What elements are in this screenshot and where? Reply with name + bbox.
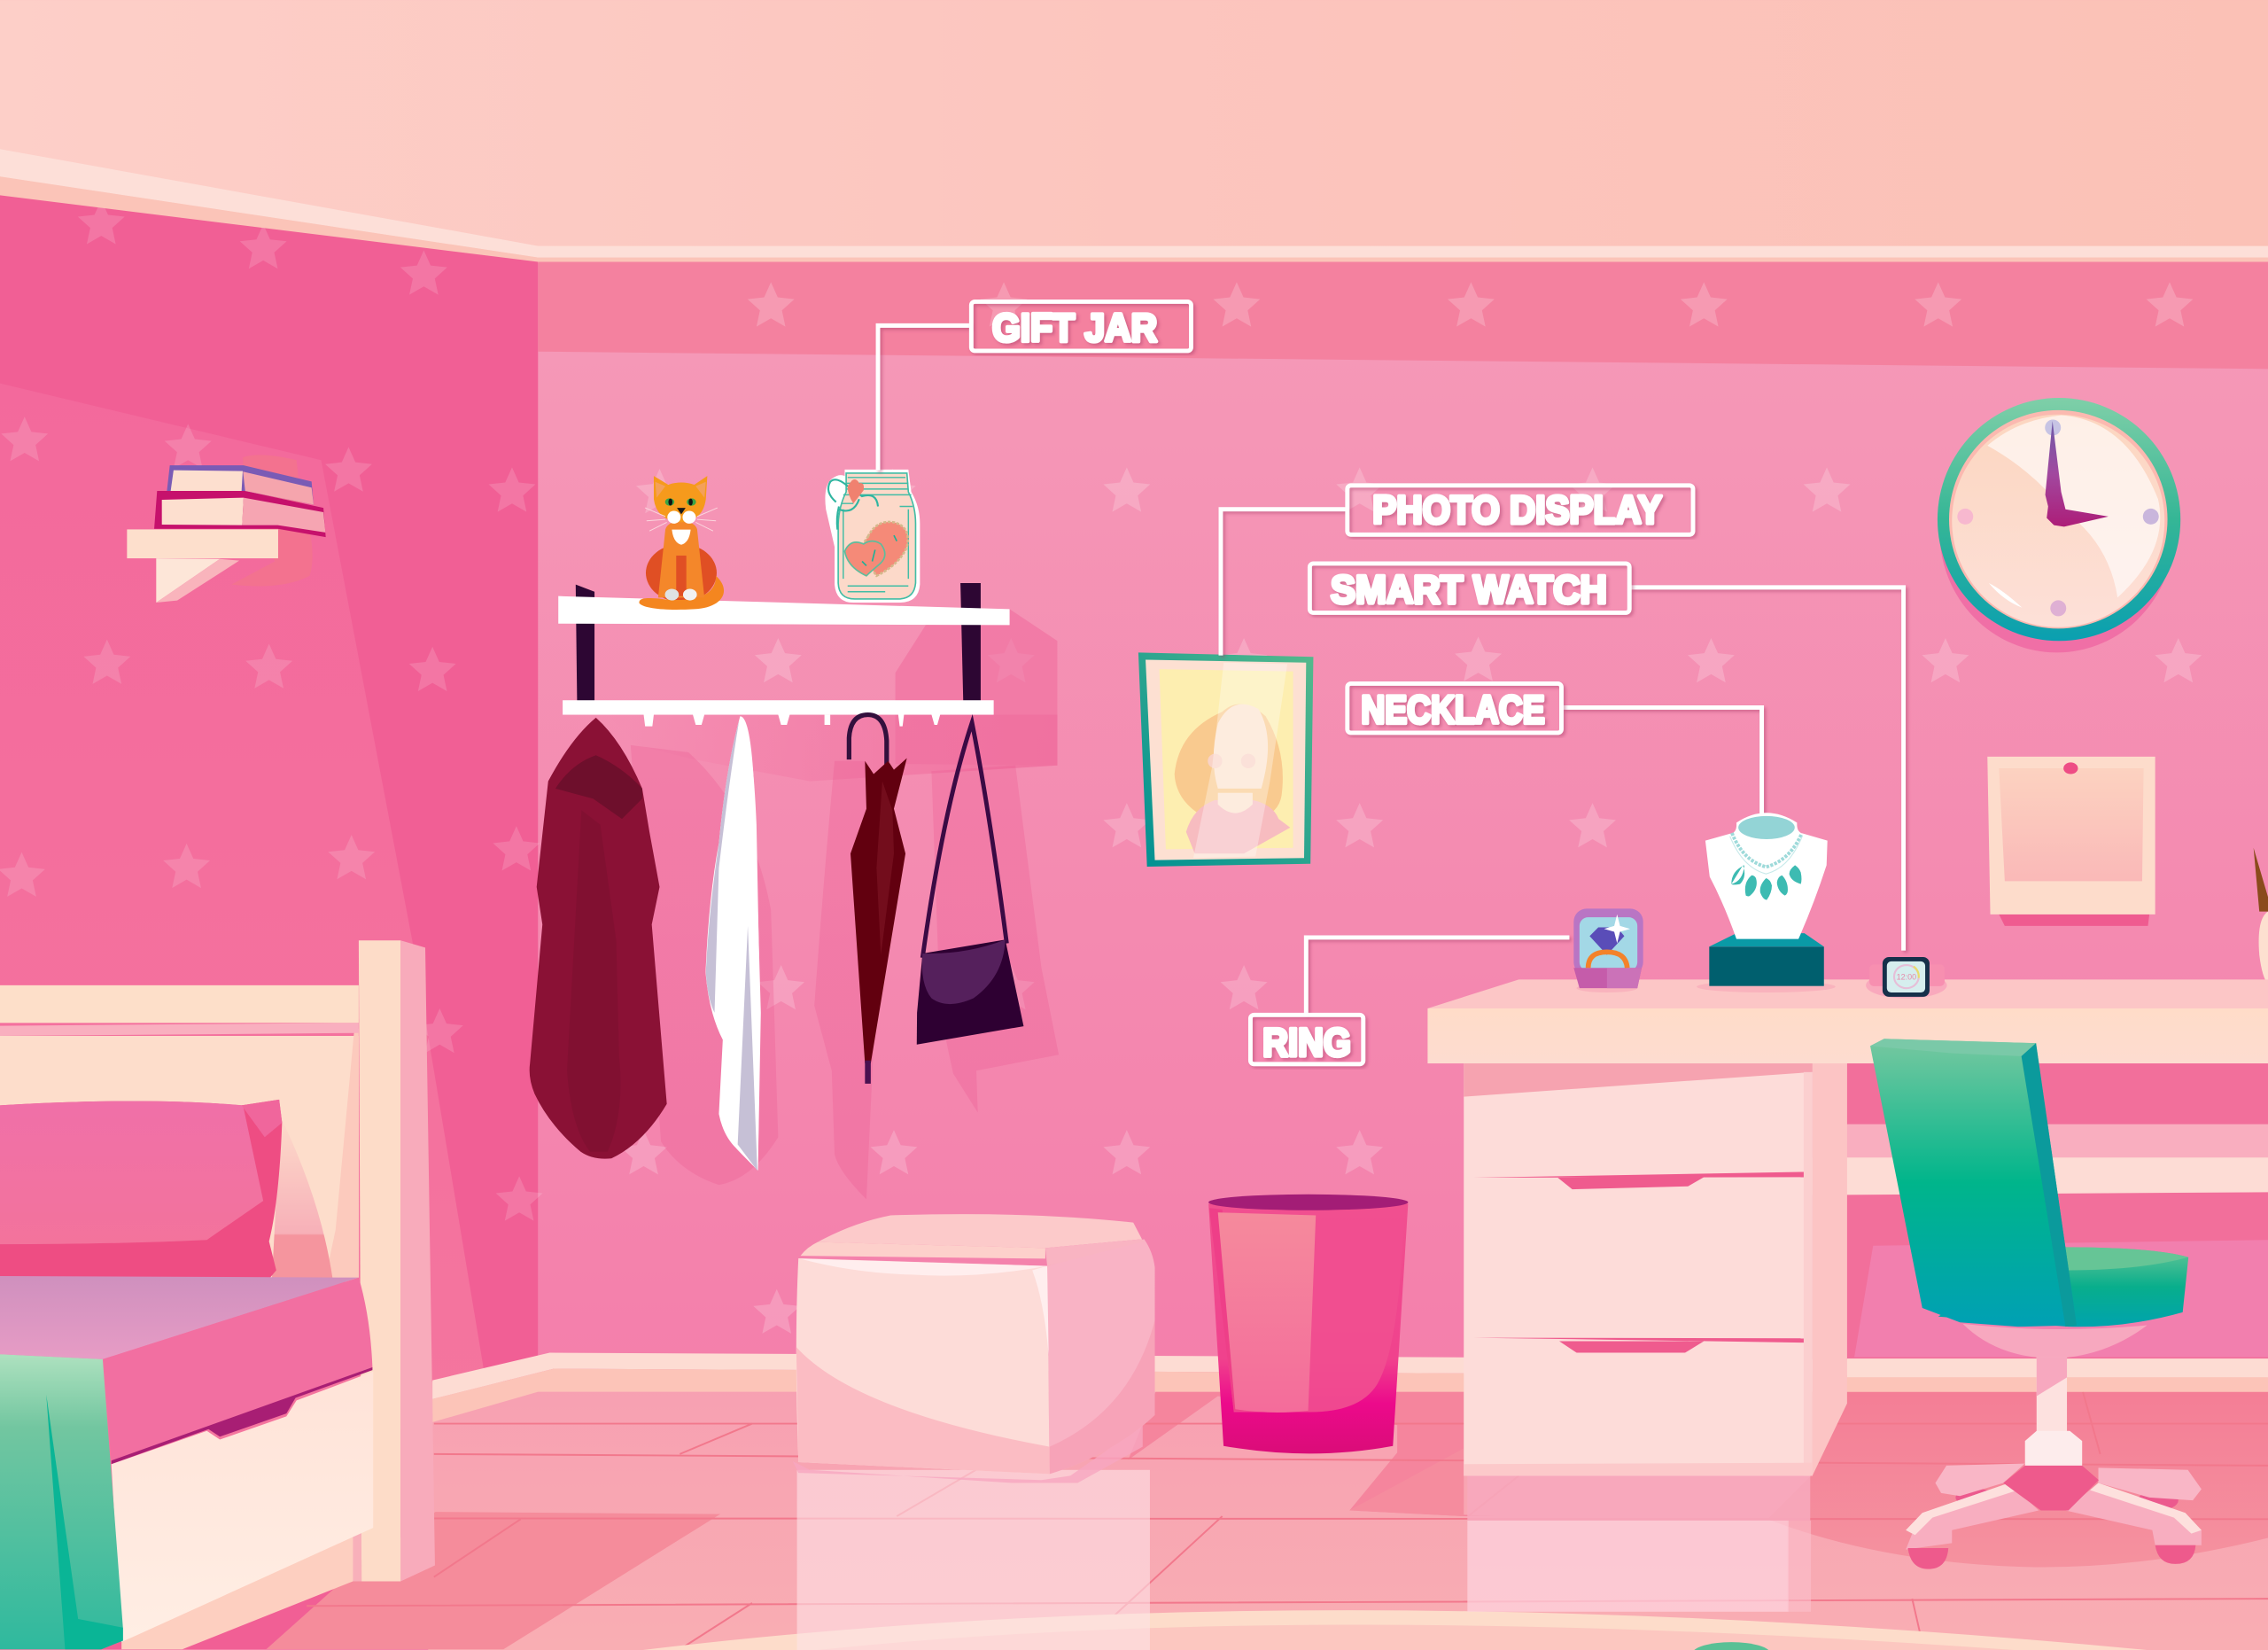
garment shadows <box>631 745 1059 1199</box>
label: gift jar: GIFT JAR <box>992 307 1157 350</box>
ceiling moulding <box>0 149 2268 262</box>
shaded floor under chair <box>1767 1392 2268 1567</box>
shelf posts <box>576 583 981 704</box>
wallpaper stars: left wall <box>0 199 543 1221</box>
smart watch: 12:00 <box>1897 972 1916 981</box>
ottoman lid <box>818 1214 1142 1248</box>
ribbon <box>828 479 878 530</box>
round rug at bottom <box>636 1610 2155 1650</box>
ottoman highlight <box>800 1258 1047 1276</box>
shaded floor near bin <box>1128 1392 1500 1516</box>
connector: necklace <box>1562 707 1762 814</box>
connector: ring <box>1306 938 1569 1015</box>
base hub <box>2003 1466 2099 1511</box>
cat figurine <box>639 476 724 610</box>
label: necklace: NECKLACE <box>1361 689 1545 732</box>
desk front edge <box>1427 1008 2268 1063</box>
ottoman front <box>796 1258 1050 1474</box>
front casters <box>1907 1548 1948 1569</box>
green blanket <box>0 1354 123 1649</box>
bed post <box>359 940 435 1582</box>
desk top surface <box>1427 979 2268 1008</box>
floor <box>266 1381 2268 1650</box>
big heart <box>859 522 908 576</box>
wall shelf with books <box>127 455 326 603</box>
handbag <box>917 723 1023 1045</box>
jar outline <box>825 470 920 603</box>
plant and vase at right edge <box>2254 848 2268 984</box>
back wall <box>538 261 2268 1374</box>
wall clock <box>1938 398 2180 652</box>
chair backrest <box>1870 1039 2077 1327</box>
necklace bust <box>1697 813 1836 992</box>
white scarf <box>705 716 761 1171</box>
small heart <box>844 541 885 576</box>
floor reflections of ottoman and drawers <box>797 1470 1811 1650</box>
cat-shaped shadow <box>231 455 313 586</box>
label: ring: RING <box>1262 1021 1351 1064</box>
office chair <box>1870 1039 2202 1569</box>
label: photo display: PHOTO DISPLAY <box>1372 489 1662 533</box>
column <box>2037 1357 2067 1432</box>
drawer handles <box>1473 1171 1804 1353</box>
gift jar <box>825 470 920 603</box>
diamond <box>1589 928 1624 955</box>
connector: gift jar <box>878 325 971 471</box>
coat <box>530 718 667 1159</box>
pillow shadow <box>272 1117 333 1279</box>
ceiling <box>0 0 2268 263</box>
connector: photo display <box>1221 510 1347 656</box>
desk drawer cabinet <box>1464 1063 1847 1475</box>
bed frame <box>0 985 373 1649</box>
framed photo display <box>1138 652 1313 867</box>
mattress <box>0 1276 372 1464</box>
ottoman pouf <box>793 1214 1155 1483</box>
ottoman side <box>1047 1239 1155 1474</box>
shaded floor bottom-left <box>266 1512 720 1649</box>
pinned note <box>1987 757 2155 926</box>
jar glass <box>838 473 915 599</box>
label: smart watch: SMART WATCH <box>1331 568 1607 611</box>
smart watch <box>1866 957 1947 999</box>
umbrella <box>849 715 907 1084</box>
base legs <box>1935 1463 2025 1496</box>
ring box <box>1573 908 1643 992</box>
shelf board <box>127 529 278 558</box>
portrait <box>1175 704 1290 853</box>
top book <box>167 465 314 504</box>
bottom book <box>154 491 326 537</box>
white top shelf <box>558 596 1010 625</box>
clock hands <box>2046 421 2109 526</box>
baseboard <box>432 1353 2268 1422</box>
ottoman contact shadow <box>793 1425 1143 1483</box>
chair seat <box>1938 1247 2188 1327</box>
bed drawer front <box>112 1372 373 1642</box>
left wall <box>0 194 538 1649</box>
under-desk back area <box>1813 1063 2268 1392</box>
hanging rack wall shadow <box>608 609 1057 782</box>
waste bin <box>1208 1195 1408 1453</box>
hook rail <box>563 700 994 727</box>
pillow <box>0 1100 282 1279</box>
connector: smart watch <box>1630 588 1904 951</box>
rear casters <box>1955 1489 1996 1506</box>
wallpaper stars: back wall <box>620 282 2203 1334</box>
